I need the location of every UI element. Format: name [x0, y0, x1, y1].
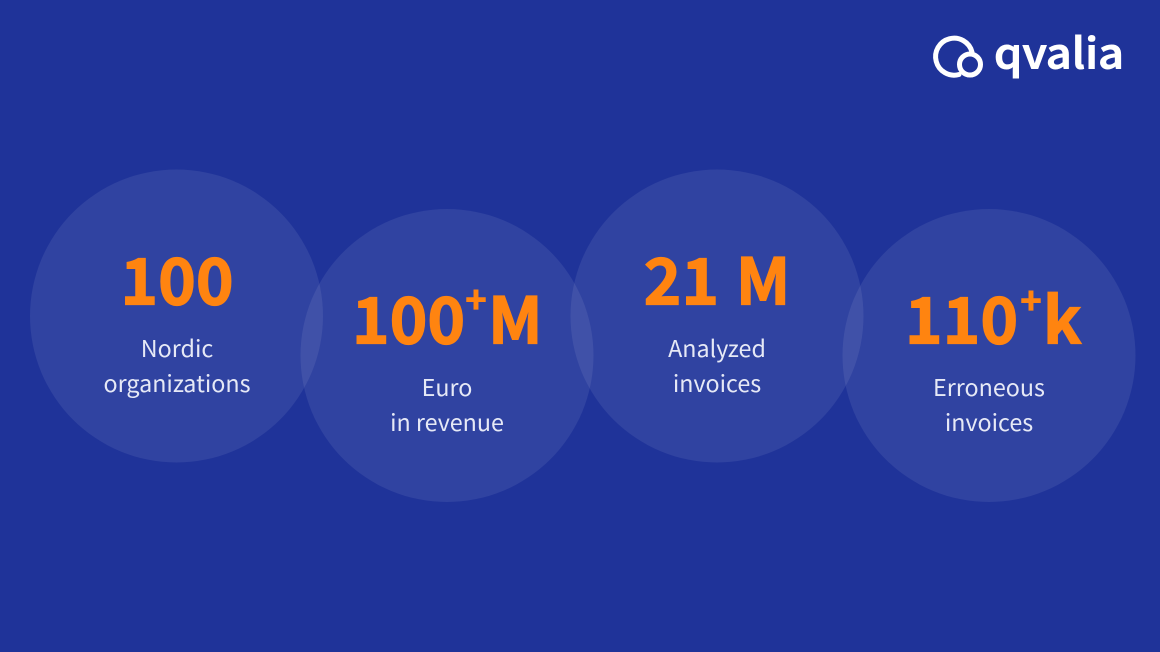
stat: 110+ k: k: [1043, 270, 1082, 362]
stat: 21 M: 21 M: [644, 232, 790, 324]
stat: 100+ M: M: [488, 270, 543, 362]
label: Euro in revenue: in revenue: [390, 404, 504, 438]
label: Nordic organizations: organizations: [103, 365, 251, 399]
panel: 100 Nordic organizations: [30, 170, 323, 462]
icon: overlapping circles: [936, 38, 980, 75]
label: Nordic organizations: Nordic: [141, 330, 213, 364]
label: Erroneous invoices: Erroneous: [933, 369, 1045, 403]
wordmark: qvalia: [994, 20, 1124, 82]
label: Analyzed invoices: invoices: [673, 365, 761, 399]
panel: 21 M Analyzed invoices: [570, 170, 864, 462]
stat: 100+ M: +: [465, 272, 487, 324]
stat: 110+ k: +: [1020, 273, 1042, 325]
label: Erroneous invoices: invoices: [945, 404, 1033, 438]
stat: 100+ M: [352, 270, 543, 362]
stat: 100: 100: [120, 232, 234, 324]
panel: 110+ k Erroneous invoices: [842, 209, 1136, 502]
stat: 110+ k: [905, 270, 1082, 362]
stat: 110+ k: 110: [905, 270, 1018, 362]
logo: qvalia: [936, 20, 1124, 82]
label: Euro in revenue: Euro: [422, 369, 472, 403]
label: Analyzed invoices: Analyzed: [668, 330, 766, 364]
stat: 100+ M: 100: [352, 270, 465, 362]
panel: 100+ M Euro in revenue: [300, 209, 594, 502]
